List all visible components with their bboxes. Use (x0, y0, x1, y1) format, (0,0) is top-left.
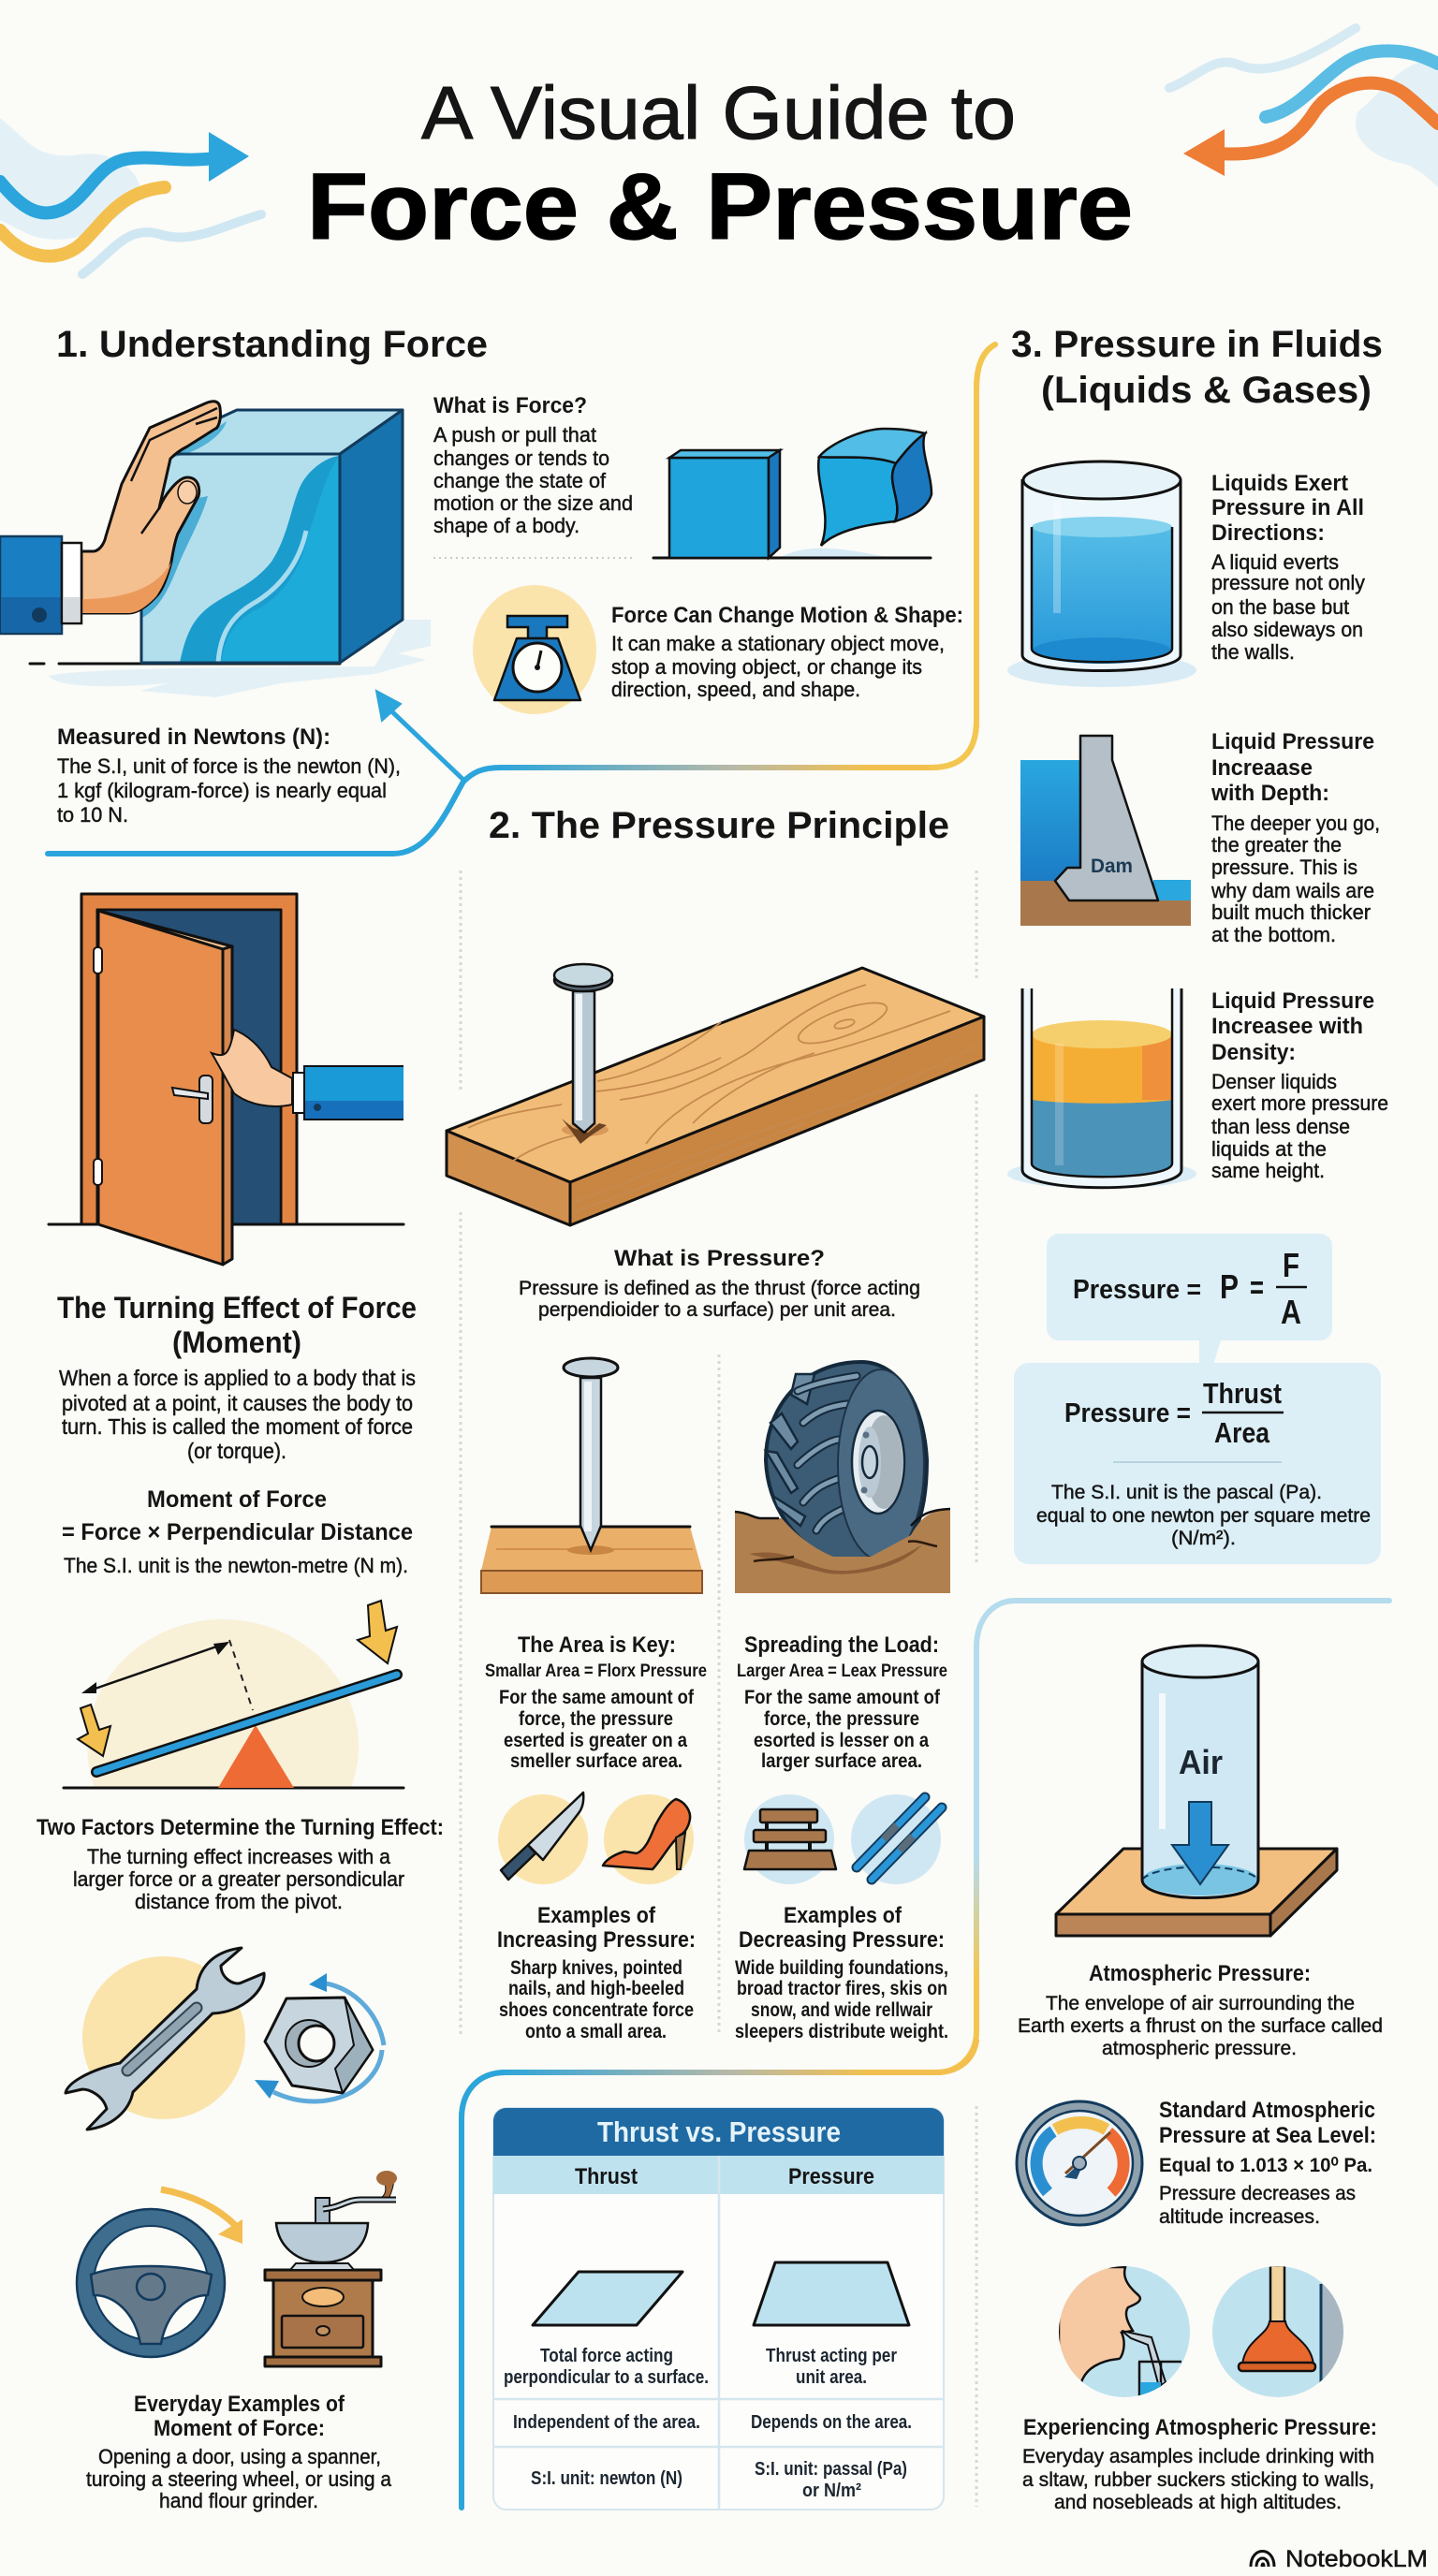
text: everyday examples of moment (86, 2392, 392, 2512)
text: what is pressure: What is Pressure? (614, 1246, 825, 1271)
heading: section 3: 3. Pressure in Fluids (1011, 324, 1383, 365)
text: standard atmospheric pressure: Standard Atmospheric (1159, 2098, 1375, 2123)
text: turning effect of force: The Turning Effect of Force (57, 1291, 417, 1325)
illustration: lever with pivot and forces (62, 1599, 404, 1790)
formula panel: pressure equals F over A: A (1281, 1293, 1301, 1331)
text: liquid pressure with depth: The deeper you go, (1211, 812, 1380, 835)
text: experiencing atmospheric pressure: Everyday asamples include drinking with (1022, 2446, 1374, 2467)
illustration: dam (1020, 736, 1191, 926)
text: the area is key: For the same amount of (499, 1687, 695, 1708)
text: what is force: A push or pull that (433, 423, 596, 446)
heading: section 3: (Liquids & Gases) (1041, 370, 1372, 411)
text: everyday examples of moment: hand flour grinder. (159, 2489, 318, 2512)
formula panel: pressure equals thrust over area: Thrust (1203, 1377, 1282, 1410)
text: examples of increasing pressure: Examples of (537, 1903, 656, 1928)
table: thrust vs pressure: Thrust (575, 2164, 638, 2189)
text: the area is key: Smallar Area = Florx Pressure (485, 1661, 707, 1681)
icon: person drinking with a straw (1059, 2266, 1190, 2401)
connector: around comparison table and atmospheric section (462, 1601, 1389, 2508)
text: experiencing atmospheric pressure (1022, 2415, 1377, 2513)
text: what is pressure (519, 1246, 920, 1321)
text: two factors: The turning effect increases with a (87, 1845, 391, 1868)
text: liquids exert pressure: also sideways on (1211, 618, 1363, 641)
text: liquid pressure with depth: why dam wails are (1211, 879, 1374, 902)
formula panel: pressure equals F over A: Pressure = (1073, 1275, 1201, 1305)
icon: knife (498, 1793, 588, 1884)
text: atmospheric pressure (1018, 1961, 1383, 2059)
table: thrust vs pressure: Total force acting (540, 2346, 673, 2366)
text: examples of increasing pressure: Increasing Pressure: (497, 1927, 696, 1953)
text: liquid pressure with density: Density: (1211, 1040, 1296, 1065)
text: standard atmospheric pressure: Pressure decreases as (1159, 2183, 1356, 2204)
formula panel: pressure equals thrust over area: (N/m²). (1171, 1528, 1236, 1549)
title (307, 71, 1133, 259)
title: A Visual Guide to (421, 71, 1016, 154)
text: what is force: change the state of (433, 469, 607, 492)
icon: skis (851, 1794, 942, 1884)
icon: building foundations (744, 1794, 836, 1884)
table: thrust vs pressure: or N/m² (802, 2481, 861, 2501)
text: liquid pressure with density (1211, 988, 1388, 1182)
text: measured in newtons: to 10 N. (57, 803, 128, 827)
text: the area is key: force, the pressure (519, 1708, 673, 1730)
text: force can change motion and shape: stop a moving object, or change its (611, 655, 922, 679)
table: thrust vs pressure (493, 2108, 944, 2510)
text: two factors: larger force or a greater persondicular (73, 1867, 404, 1891)
text: force can change motion and shape: direction, speed, and shape. (611, 678, 860, 701)
text: atmospheric pressure: Atmospheric Pressure: (1089, 1961, 1311, 1986)
text: liquid pressure with density: same height. (1211, 1159, 1325, 1182)
table: thrust vs pressure: Independent of the area. (513, 2412, 700, 2433)
text: everyday examples of moment: Moment of Force: (154, 2416, 325, 2441)
text: what is force: changes or tends to (433, 446, 609, 470)
table: thrust vs pressure: S:I. unit: passal (Pa) (755, 2459, 907, 2480)
text: experiencing atmospheric pressure: a sltaw, rubber suckers sticking to walls, (1022, 2469, 1374, 2491)
text: what is force (433, 393, 633, 537)
illustration: door being opened by a hand (49, 894, 404, 1265)
text: spreading the load: For the same amount of (744, 1687, 941, 1708)
text: liquid pressure with density: Denser liquids (1211, 1070, 1337, 1093)
illustration: hand pushing a cube (0, 402, 431, 697)
text: spreading the load: Spreading the Load: (744, 1632, 939, 1658)
formula panel: pressure equals F over A (1047, 1234, 1332, 1365)
illustration: spanner and nut (66, 1948, 384, 2130)
text: liquids exert pressure: Liquids Exert (1211, 471, 1348, 496)
text: the area is key: eserted is greater on a (504, 1730, 687, 1751)
table: thrust vs pressure: Thrust vs. Pressure (597, 2115, 841, 2148)
text: liquid pressure with depth: Increaase (1211, 755, 1313, 781)
text: examples of increasing pressure: onto a small area. (525, 2021, 667, 2042)
decoration: left waves and arrow (0, 118, 261, 274)
text: force can change motion and shape (611, 603, 963, 701)
text: examples of increasing pressure: Sharp knives, pointed (510, 1957, 682, 1979)
decoration: right waves and arrow (1169, 28, 1438, 187)
formula panel: pressure equals thrust over area: Area (1214, 1416, 1270, 1449)
text: examples of decreasing pressure: snow, and wide rellwair (751, 1999, 932, 2021)
text: measured in newtons: 1 kgf (kilogram-force) is nearly equal (57, 779, 387, 802)
text: liquid pressure with density: than less dense (1211, 1115, 1350, 1138)
text: standard atmospheric pressure: Equal to 1.013 × 10⁰ Pa. (1159, 2155, 1372, 2176)
formula panel: pressure equals thrust over area: equal to one newton per square metre (1036, 1505, 1371, 1527)
text: everyday examples of moment: Opening a door, using a spanner, (98, 2445, 381, 2468)
text: atmospheric pressure: atmospheric pressure. (1102, 2038, 1297, 2059)
text: liquid pressure with depth: at the bottom. (1211, 923, 1336, 946)
illustration: nail on small area (481, 1358, 702, 1593)
text: atmospheric pressure: Earth exerts a fhrust on the surface called (1018, 2015, 1383, 2037)
illustration: large nail in wooden plank (447, 964, 984, 1225)
text: spreading the load: esorted is lesser on a (754, 1730, 929, 1751)
text: measured in newtons (57, 724, 401, 827)
text: examples of increasing pressure (497, 1903, 696, 2042)
icon: rubber plunger on wall (1212, 2265, 1345, 2401)
text: liquids exert pressure: the walls. (1211, 640, 1295, 664)
text: spreading the load: Larger Area = Leax Pressure (737, 1661, 947, 1681)
text: examples of decreasing pressure: Examples of (784, 1903, 902, 1928)
text: examples of increasing pressure: nails, and high-beeled (508, 1978, 684, 1999)
text: two factors (37, 1815, 444, 1913)
illustration: beaker of water (1007, 461, 1196, 687)
text: experiencing atmospheric pressure: Experiencing Atmospheric Pressure: (1023, 2415, 1377, 2440)
text: liquids exert pressure: on the base but (1211, 595, 1349, 619)
formula panel: pressure equals thrust over area (1014, 1363, 1381, 1564)
text: liquids exert pressure: A liquid everts (1211, 550, 1339, 574)
text: two factors: distance from the pivot. (135, 1890, 343, 1913)
text: examples of decreasing pressure: Wide building foundations, (735, 1957, 948, 1979)
text: examples of decreasing pressure: sleepers distribute weight. (735, 2021, 948, 2042)
logo: NotebookLM: NotebookLM (1285, 2546, 1428, 2572)
formula panel: pressure equals thrust over area: The S.I. unit is the pascal (Pa). (1051, 1482, 1322, 1503)
text: two factors: Two Factors Determine the Turning Effect: (37, 1815, 444, 1840)
text: what is force: motion or the size and (433, 491, 633, 515)
illustration: steering wheel and hand grinder (77, 2171, 397, 2366)
text: liquids exert pressure: Pressure in All (1211, 495, 1364, 520)
text: examples of decreasing pressure (735, 1903, 948, 2042)
text: liquids exert pressure (1211, 471, 1365, 664)
text: liquid pressure with density: Liquid Pressure (1211, 988, 1374, 1014)
text: standard atmospheric pressure: Pressure at Sea Level: (1159, 2123, 1376, 2148)
title: Force & Pressure (307, 154, 1133, 259)
text: everyday examples of moment: turoing a steering wheel, or using a (86, 2467, 392, 2491)
formula panel: pressure equals F over A: F (1283, 1246, 1299, 1284)
table: thrust vs pressure: Depends on the area. (751, 2412, 912, 2433)
text: liquid pressure with depth: with Depth: (1211, 781, 1329, 806)
illustration: dam: Dam (1091, 856, 1133, 877)
text: standard atmospheric pressure (1159, 2098, 1376, 2228)
heading: section 1: 1. Understanding Force (56, 324, 488, 365)
text: the area is key: smeller surface area. (510, 1750, 682, 1772)
illustration: air column on a board (1056, 1646, 1337, 1936)
text: turning effect of force (57, 1291, 417, 1577)
text: liquid pressure with depth: pressure. This is (1211, 856, 1357, 879)
text: measured in newtons: Measured in Newtons (N): (57, 724, 330, 750)
text: liquid pressure with density: exert more pressure (1211, 1091, 1388, 1115)
icon: high-heeled shoe (603, 1794, 694, 1884)
text: what is pressure: perpendioider to a surface) per unit area. (538, 1299, 896, 1321)
text: turning effect of force: Moment of Force (147, 1486, 327, 1513)
text: liquid pressure with density: liquids at the (1211, 1137, 1327, 1161)
formula panel: pressure equals F over A: = (1250, 1270, 1264, 1306)
text: liquids exert pressure: Directions: (1211, 520, 1325, 546)
text: force can change motion and shape: It can make a stationary object move, (611, 632, 945, 655)
text: what is pressure: Pressure is defined as the thrust (force acting (519, 1278, 920, 1299)
illustration: tractor tyre on soft ground (735, 1362, 950, 1593)
text: measured in newtons: The S.I, unit of force is the newton (N), (57, 754, 401, 778)
text: spreading the load: larger surface area. (761, 1750, 922, 1772)
text: turning effect of force: (or torque). (187, 1439, 286, 1463)
illustration: air column on a board: Air (1179, 1743, 1223, 1781)
text: liquid pressure with depth: the greater the (1211, 833, 1342, 856)
text: turning effect of force: (Moment) (172, 1325, 301, 1359)
illustration: cube before and after deformation (653, 429, 932, 558)
text: everyday examples of moment: Everyday Examples of (134, 2392, 345, 2417)
illustration: beaker with two liquids (1007, 988, 1196, 1189)
text: the area is key (485, 1632, 707, 1772)
text: examples of increasing pressure: shoes concentrate force (499, 1999, 694, 2021)
text: turning effect of force: pivoted at a point, it causes the body to (62, 1391, 413, 1415)
icon: pressure gauge (1017, 2101, 1142, 2225)
table: thrust vs pressure: perpondicular to a surface. (504, 2367, 709, 2388)
text: what is force: shape of a body. (433, 514, 580, 537)
text: turning effect of force: When a force is applied to a body that is (59, 1366, 416, 1390)
text: what is force: What is Force? (433, 393, 587, 418)
formula panel: pressure equals thrust over area: Pressure = (1064, 1398, 1191, 1428)
text: examples of decreasing pressure: Decreasing Pressure: (739, 1927, 945, 1953)
table: thrust vs pressure: unit area. (796, 2367, 867, 2388)
icon: weighing scale (473, 585, 596, 714)
text: atmospheric pressure: The envelope of air surrounding the (1046, 1993, 1355, 2014)
text: experiencing atmospheric pressure: and nosebleads at high altitudes. (1054, 2492, 1342, 2513)
text: liquid pressure with depth: Liquid Pressure (1211, 729, 1374, 754)
text: the area is key: The Area is Key: (518, 1632, 676, 1658)
text: examples of decreasing pressure: broad tractor fires, skis on (737, 1978, 947, 1999)
text: turning effect of force: = Force × Perpendicular Distance (62, 1519, 413, 1545)
table: thrust vs pressure: Pressure (788, 2164, 874, 2189)
connector: blue to yellow flow from section 1 to 3 (48, 344, 995, 854)
formula panel: pressure equals F over A: P (1220, 1267, 1239, 1306)
text: turning effect of force: turn. This is called the moment of force (62, 1414, 413, 1439)
heading: section 2: 2. The Pressure Principle (489, 805, 949, 846)
text: liquids exert pressure: pressure not only (1211, 571, 1365, 594)
text: turning effect of force: The S.I. unit is the newton-metre (N m). (64, 1554, 408, 1577)
text: liquid pressure with depth: built much thicker (1211, 900, 1371, 924)
table: thrust vs pressure: S:I. unit: newton (N) (531, 2468, 682, 2489)
table header (493, 2108, 944, 2156)
table: thrust vs pressure: Thrust acting per (766, 2346, 897, 2366)
text: standard atmospheric pressure: altitude increases. (1159, 2206, 1320, 2228)
text: force can change motion and shape: Force Can Change Motion & Shape: (611, 603, 963, 628)
text: spreading the load (737, 1632, 947, 1772)
text: liquid pressure with density: Increasee with (1211, 1014, 1363, 1039)
heading: section 3 (1011, 324, 1383, 411)
text: spreading the load: force, the pressure (764, 1708, 919, 1730)
text: liquid pressure with depth (1211, 729, 1380, 946)
